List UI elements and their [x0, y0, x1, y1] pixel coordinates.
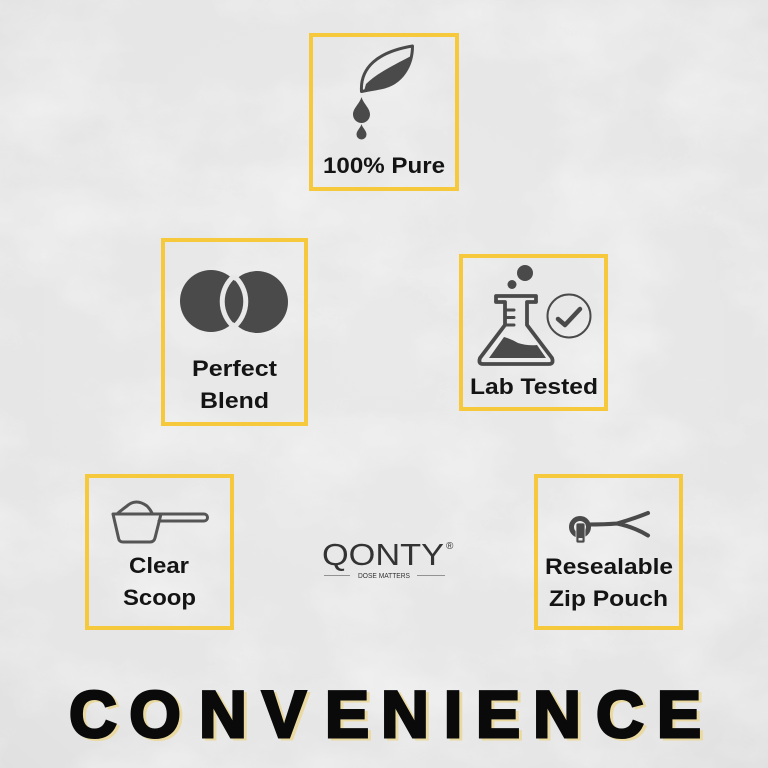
title: CONVENIENCE: CONVENIENCE	[69, 677, 701, 751]
icon: scoop	[113, 502, 208, 542]
panel: 100% Pure	[311, 35, 457, 189]
label: Resealable Zip Pouch: Resealable	[545, 554, 673, 579]
icon: flask with bubbles	[479, 265, 553, 364]
icon: check circle	[548, 294, 590, 338]
label: Perfect Blend: Perfect	[192, 356, 278, 381]
label: Clear Scoop	[123, 553, 196, 610]
panel: Resealable Zip Pouch	[536, 476, 681, 628]
icon: leaf with drops	[353, 46, 412, 140]
label: Perfect Blend	[192, 356, 278, 413]
icon: overlapping circles	[180, 270, 288, 333]
label: Resealable Zip Pouch: Zip Pouch	[549, 586, 668, 611]
label: Perfect Blend: Blend	[200, 388, 269, 413]
panel: Clear Scoop	[87, 476, 232, 628]
logo: Qonty: QONTY	[322, 537, 444, 572]
logo: Qonty: DOSE MATTERS	[358, 573, 410, 580]
panel: Lab Tested	[461, 256, 606, 409]
panel: Perfect Blend	[163, 240, 306, 424]
label: Lab Tested: Lab Tested	[470, 374, 598, 399]
logo: Qonty	[322, 537, 454, 580]
label: Clear Scoop: Clear	[129, 553, 189, 578]
label: Clear Scoop: Scoop	[123, 585, 196, 610]
logo: Qonty: ®	[446, 541, 454, 552]
label: 100% Pure: 100% Pure	[323, 153, 445, 178]
icon: zip slider	[572, 513, 648, 543]
label: Resealable Zip Pouch	[545, 554, 673, 611]
